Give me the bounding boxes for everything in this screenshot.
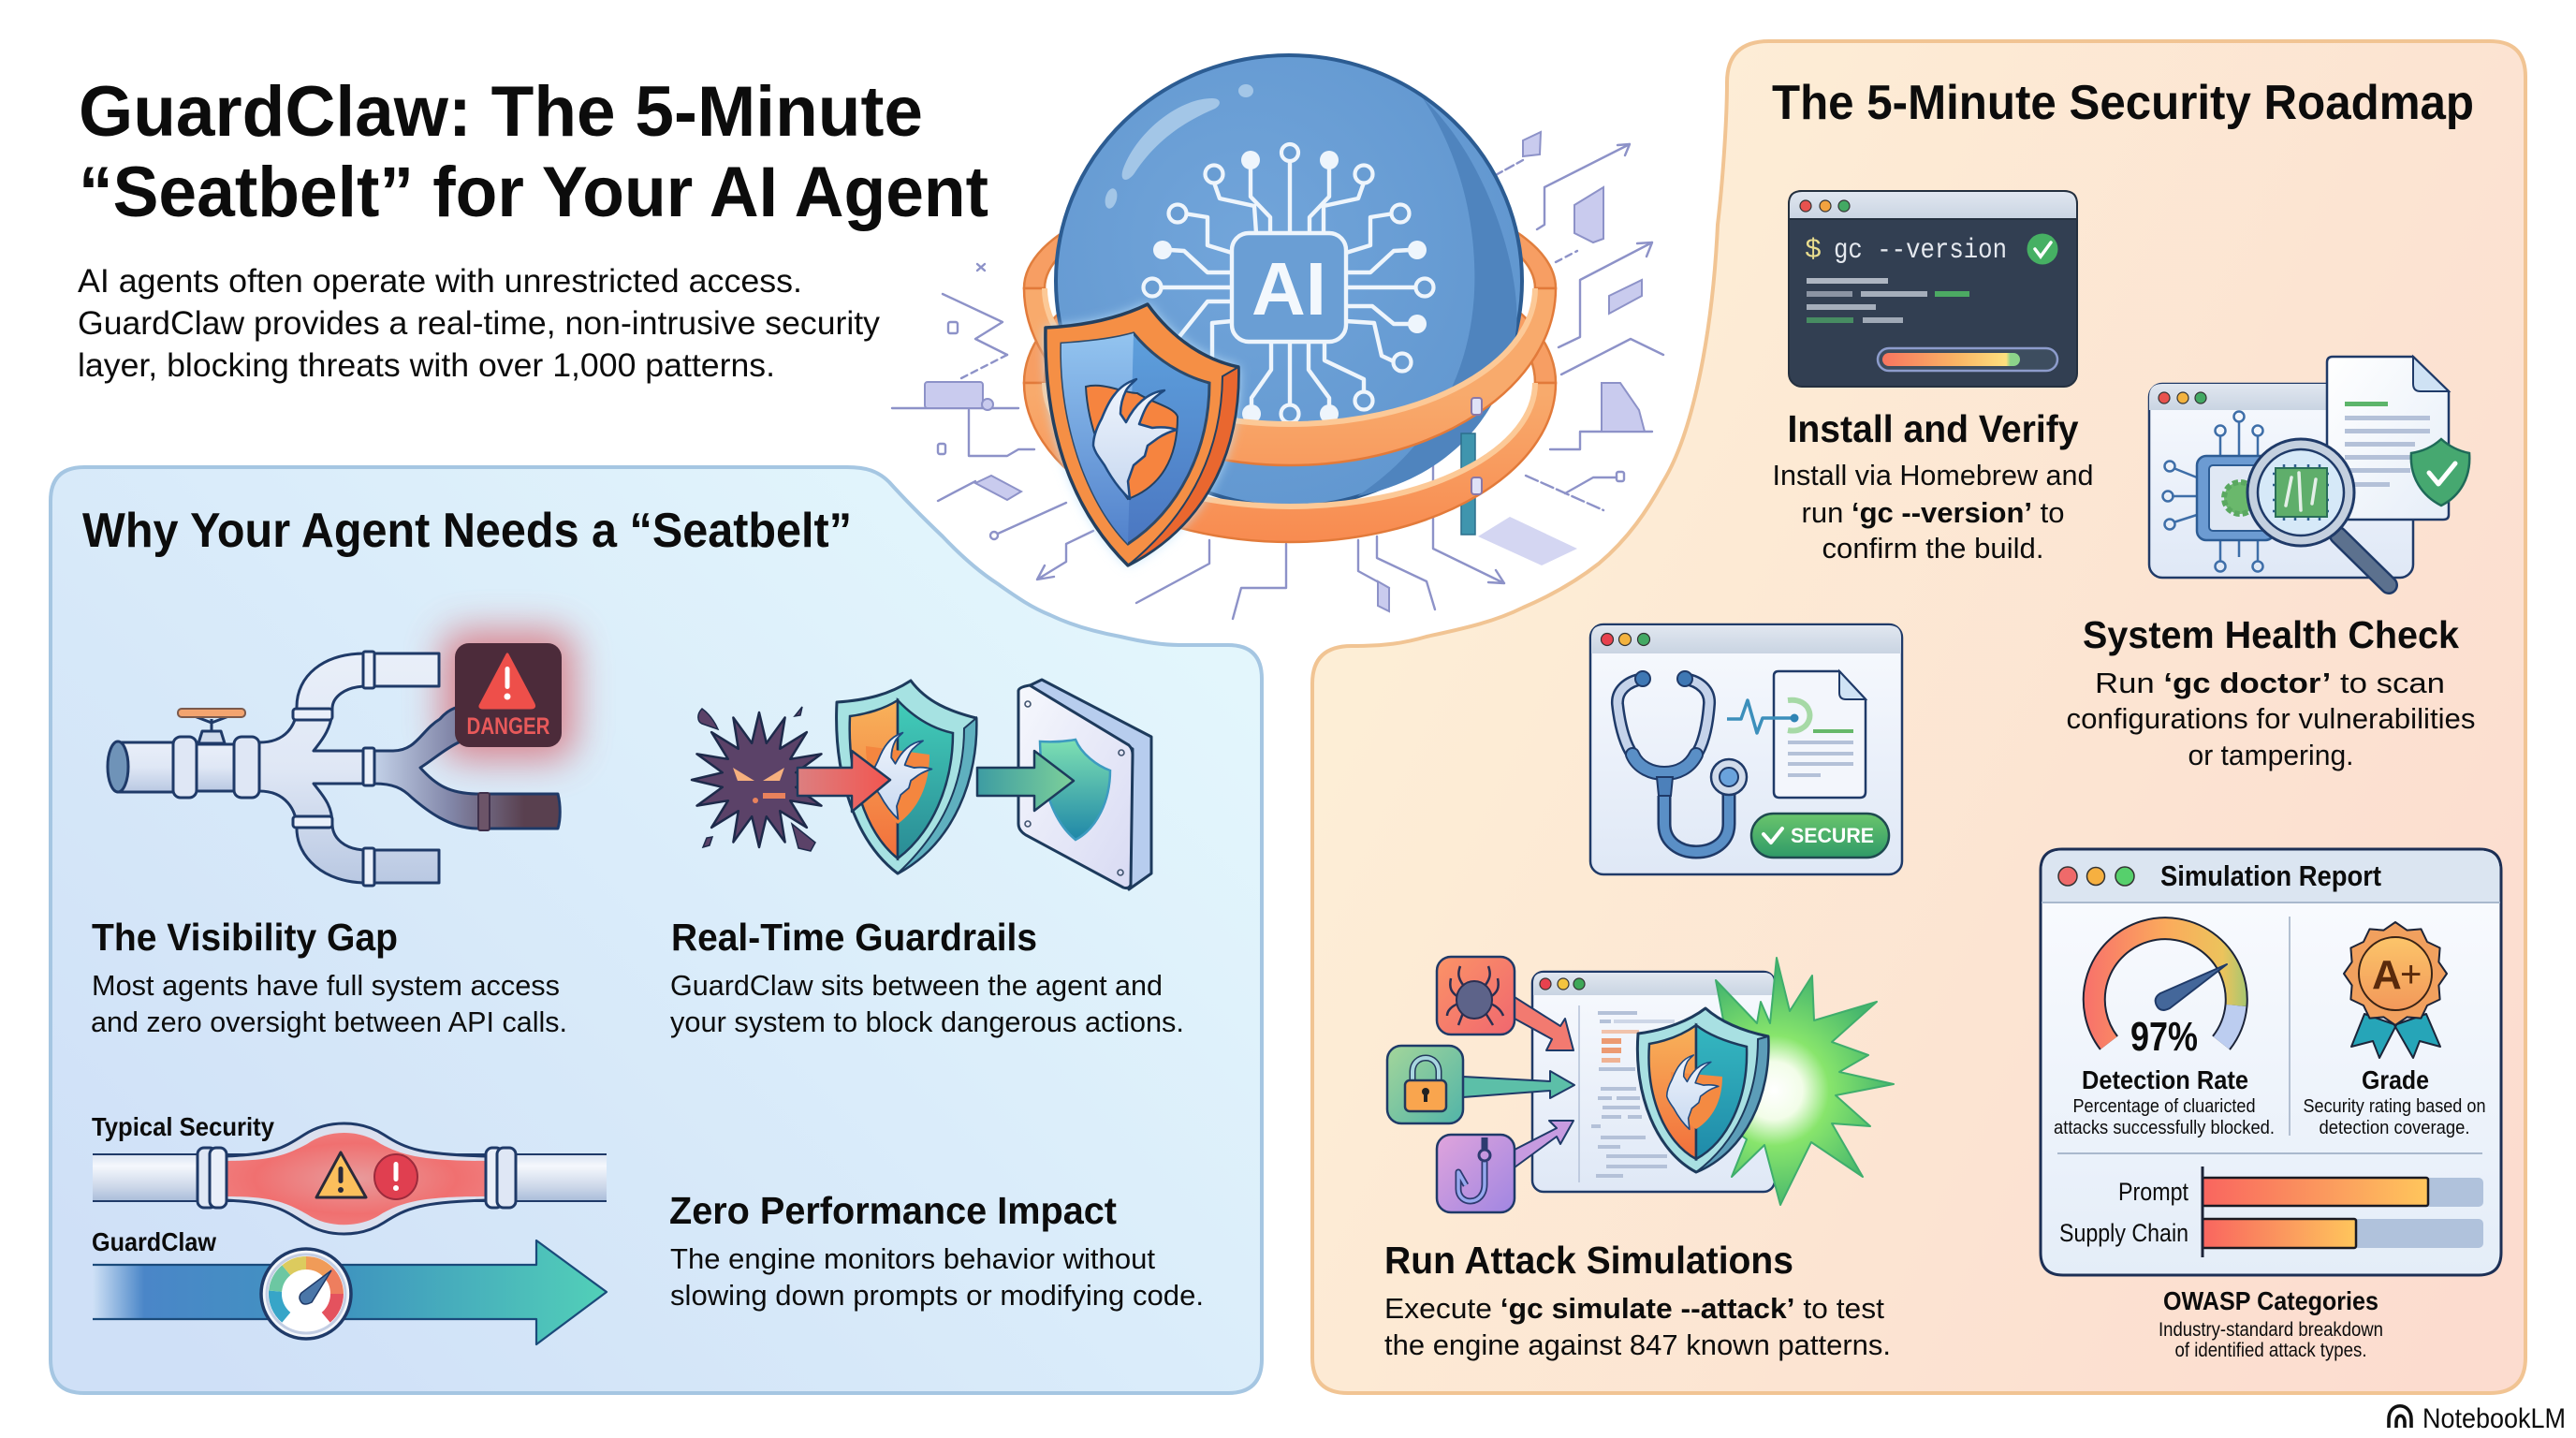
card: zero performance impact: Zero Performance Impact xyxy=(669,1189,1117,1232)
card: real-time guardrails: GuardClaw sits between the agent and xyxy=(670,969,1163,1002)
arrow: lock xyxy=(1463,1071,1574,1098)
intro text: GuardClaw provides a real-time, non-intrusive security xyxy=(78,305,881,342)
arrow: hook xyxy=(1515,1121,1573,1167)
pulse line xyxy=(1727,700,1794,733)
report title: Simulation Report xyxy=(2160,859,2381,892)
detection rate gauge: 97% xyxy=(2130,1014,2198,1060)
grade medal: A xyxy=(2372,952,2402,998)
step: system health check: System Health Check xyxy=(2083,613,2459,656)
icon: attack simulation xyxy=(1387,957,1894,1212)
title: GuardClaw: The 5-Minute xyxy=(79,72,923,152)
grade text: detection coverage. xyxy=(2320,1117,2469,1138)
detection rate text: Percentage of cluaricted xyxy=(2072,1095,2256,1117)
icon: terminal window: $ xyxy=(1805,235,1822,267)
owasp bars: Prompt xyxy=(2118,1178,2188,1206)
title: “Seatbelt” for Your AI Agent xyxy=(79,153,988,232)
label: typical security: Typical Security xyxy=(92,1112,274,1141)
seatbelt front bands xyxy=(1024,288,1556,542)
icon: terminal window: gc --version xyxy=(1834,235,2007,267)
card: the visibility gap: The Visibility Gap xyxy=(92,916,398,959)
detection rate text xyxy=(2054,1065,2275,1138)
chip with gear xyxy=(2162,412,2275,571)
icon: threat blocked by shield protecting system xyxy=(692,680,1151,889)
heading: the 5-minute security roadmap: The 5-Minute Security Roadmap xyxy=(1772,76,2474,130)
green arrow xyxy=(977,751,1074,811)
phishing hook tile xyxy=(1437,1135,1515,1212)
panel: simulation report xyxy=(2041,849,2501,1275)
danger glow xyxy=(442,630,575,760)
step: install and verify: Install and Verify xyxy=(1788,407,2079,450)
danger sign xyxy=(455,643,562,747)
step: install and verify: run ‘gc --version’ to xyxy=(1801,496,2065,529)
threat starburst xyxy=(692,707,827,851)
step: system health check: or tampering. xyxy=(2188,739,2353,771)
detection rate text: Detection Rate xyxy=(2082,1065,2248,1094)
grade medal: + xyxy=(2400,954,2422,995)
card: the visibility gap: and zero oversight between API calls. xyxy=(91,1005,567,1038)
icon: system health scan window with magnifier xyxy=(2149,357,2469,585)
icon: stethoscope window with secure badge xyxy=(1590,624,1902,874)
shield with claw xyxy=(1046,304,1238,565)
card: zero performance impact: The engine monitors behavior without xyxy=(670,1242,1155,1275)
card: the visibility gap: Most agents have full system access xyxy=(92,969,560,1002)
report window frame xyxy=(2041,849,2501,1275)
step: system health check xyxy=(2067,613,2475,771)
caption: owasp categories: of identified attack types. xyxy=(2175,1340,2366,1361)
step: install and verify xyxy=(1773,407,2093,565)
card: real-time guardrails: Real-Time Guardrails xyxy=(671,916,1037,959)
step: run attack simulations xyxy=(1384,1239,1891,1361)
bug tile xyxy=(1437,957,1515,1034)
grade text xyxy=(2303,1065,2486,1138)
step: run attack simulations: Run Attack Simulations xyxy=(1384,1239,1793,1282)
caption: owasp categories xyxy=(2159,1286,2383,1361)
shield xyxy=(1637,1008,1768,1172)
report document xyxy=(1774,671,1866,798)
step: system health check: Run ‘gc doctor’ to scan xyxy=(2095,667,2445,699)
card: real-time guardrails: your system to block dangerous actions. xyxy=(670,1005,1184,1038)
icon: terminal window xyxy=(1789,191,2077,387)
owasp bars: Supply Chain xyxy=(2059,1219,2188,1247)
pipe network xyxy=(108,652,560,886)
step: run attack simulations: Execute ‘gc simulate --attack’ to test xyxy=(1384,1292,1884,1325)
lock tile xyxy=(1387,1046,1463,1123)
icon: pipes with danger sign xyxy=(108,630,575,886)
AI sphere xyxy=(1056,55,1522,506)
valve xyxy=(178,709,245,743)
grade medal xyxy=(2344,922,2447,1058)
seatbelt back bands xyxy=(1024,181,1556,383)
arrow: bug xyxy=(1515,997,1573,1050)
secure badge xyxy=(1751,814,1889,858)
protected wall plate xyxy=(1018,680,1151,889)
document xyxy=(2327,357,2449,520)
grade text: Grade xyxy=(2362,1065,2429,1094)
red arrow xyxy=(798,751,890,812)
intro text xyxy=(78,263,881,384)
card: zero performance impact xyxy=(669,1189,1204,1312)
intro text: AI agents often operate with unrestricted access. xyxy=(78,263,802,300)
step: install and verify: Install via Homebrew and xyxy=(1773,459,2093,492)
step: system health check: configurations for vulnerabilities xyxy=(2067,702,2475,735)
intro text: layer, blocking threats with over 1,000 patterns. xyxy=(78,347,775,384)
stethoscope xyxy=(1617,671,1747,852)
caption: owasp categories: Industry-standard breakdown xyxy=(2159,1319,2383,1341)
chart: typical security vs guardclaw latency pipes xyxy=(92,1112,607,1344)
grade text: Security rating based on xyxy=(2303,1095,2486,1117)
step: install and verify: confirm the build. xyxy=(1822,532,2044,565)
card: the visibility gap xyxy=(91,916,567,1038)
detection rate text: attacks successfully blocked. xyxy=(2054,1117,2275,1138)
AI chip with circuit: AI xyxy=(1251,247,1326,330)
green impact burst xyxy=(1716,958,1894,1205)
panel: why your agent needs a seatbelt xyxy=(51,467,1262,1393)
secure badge: SECURE xyxy=(1791,824,1874,847)
label: guardclaw: GuardClaw xyxy=(92,1227,216,1256)
teal buckle strap xyxy=(1461,433,1475,535)
guardclaw arrow with gauge xyxy=(93,1240,607,1344)
shield xyxy=(837,681,976,873)
step: run attack simulations: the engine against 847 known patterns. xyxy=(1384,1328,1891,1361)
typical security pipe with bottleneck xyxy=(93,1123,607,1234)
green shield xyxy=(2411,439,2469,506)
AI chip with circuit xyxy=(1144,144,1434,423)
danger sign: DANGER xyxy=(466,713,550,740)
owasp bars xyxy=(2059,1167,2483,1257)
caption: owasp categories: OWASP Categories xyxy=(2163,1286,2378,1315)
magnifier xyxy=(2247,439,2389,585)
card: zero performance impact: slowing down prompts or modifying code. xyxy=(670,1279,1204,1312)
hero illustration: AI sphere with seatbelt and shield xyxy=(892,55,1663,619)
title xyxy=(79,72,988,232)
card: real-time guardrails xyxy=(670,916,1184,1038)
detection rate gauge xyxy=(2094,929,2236,1060)
code window xyxy=(1532,972,1775,1192)
circuit decorations xyxy=(892,132,1663,619)
panel: security roadmap xyxy=(1312,41,2525,1393)
heading: why your agent needs a seatbelt: Why Your Agent Needs a “Seatbelt” xyxy=(82,504,852,558)
